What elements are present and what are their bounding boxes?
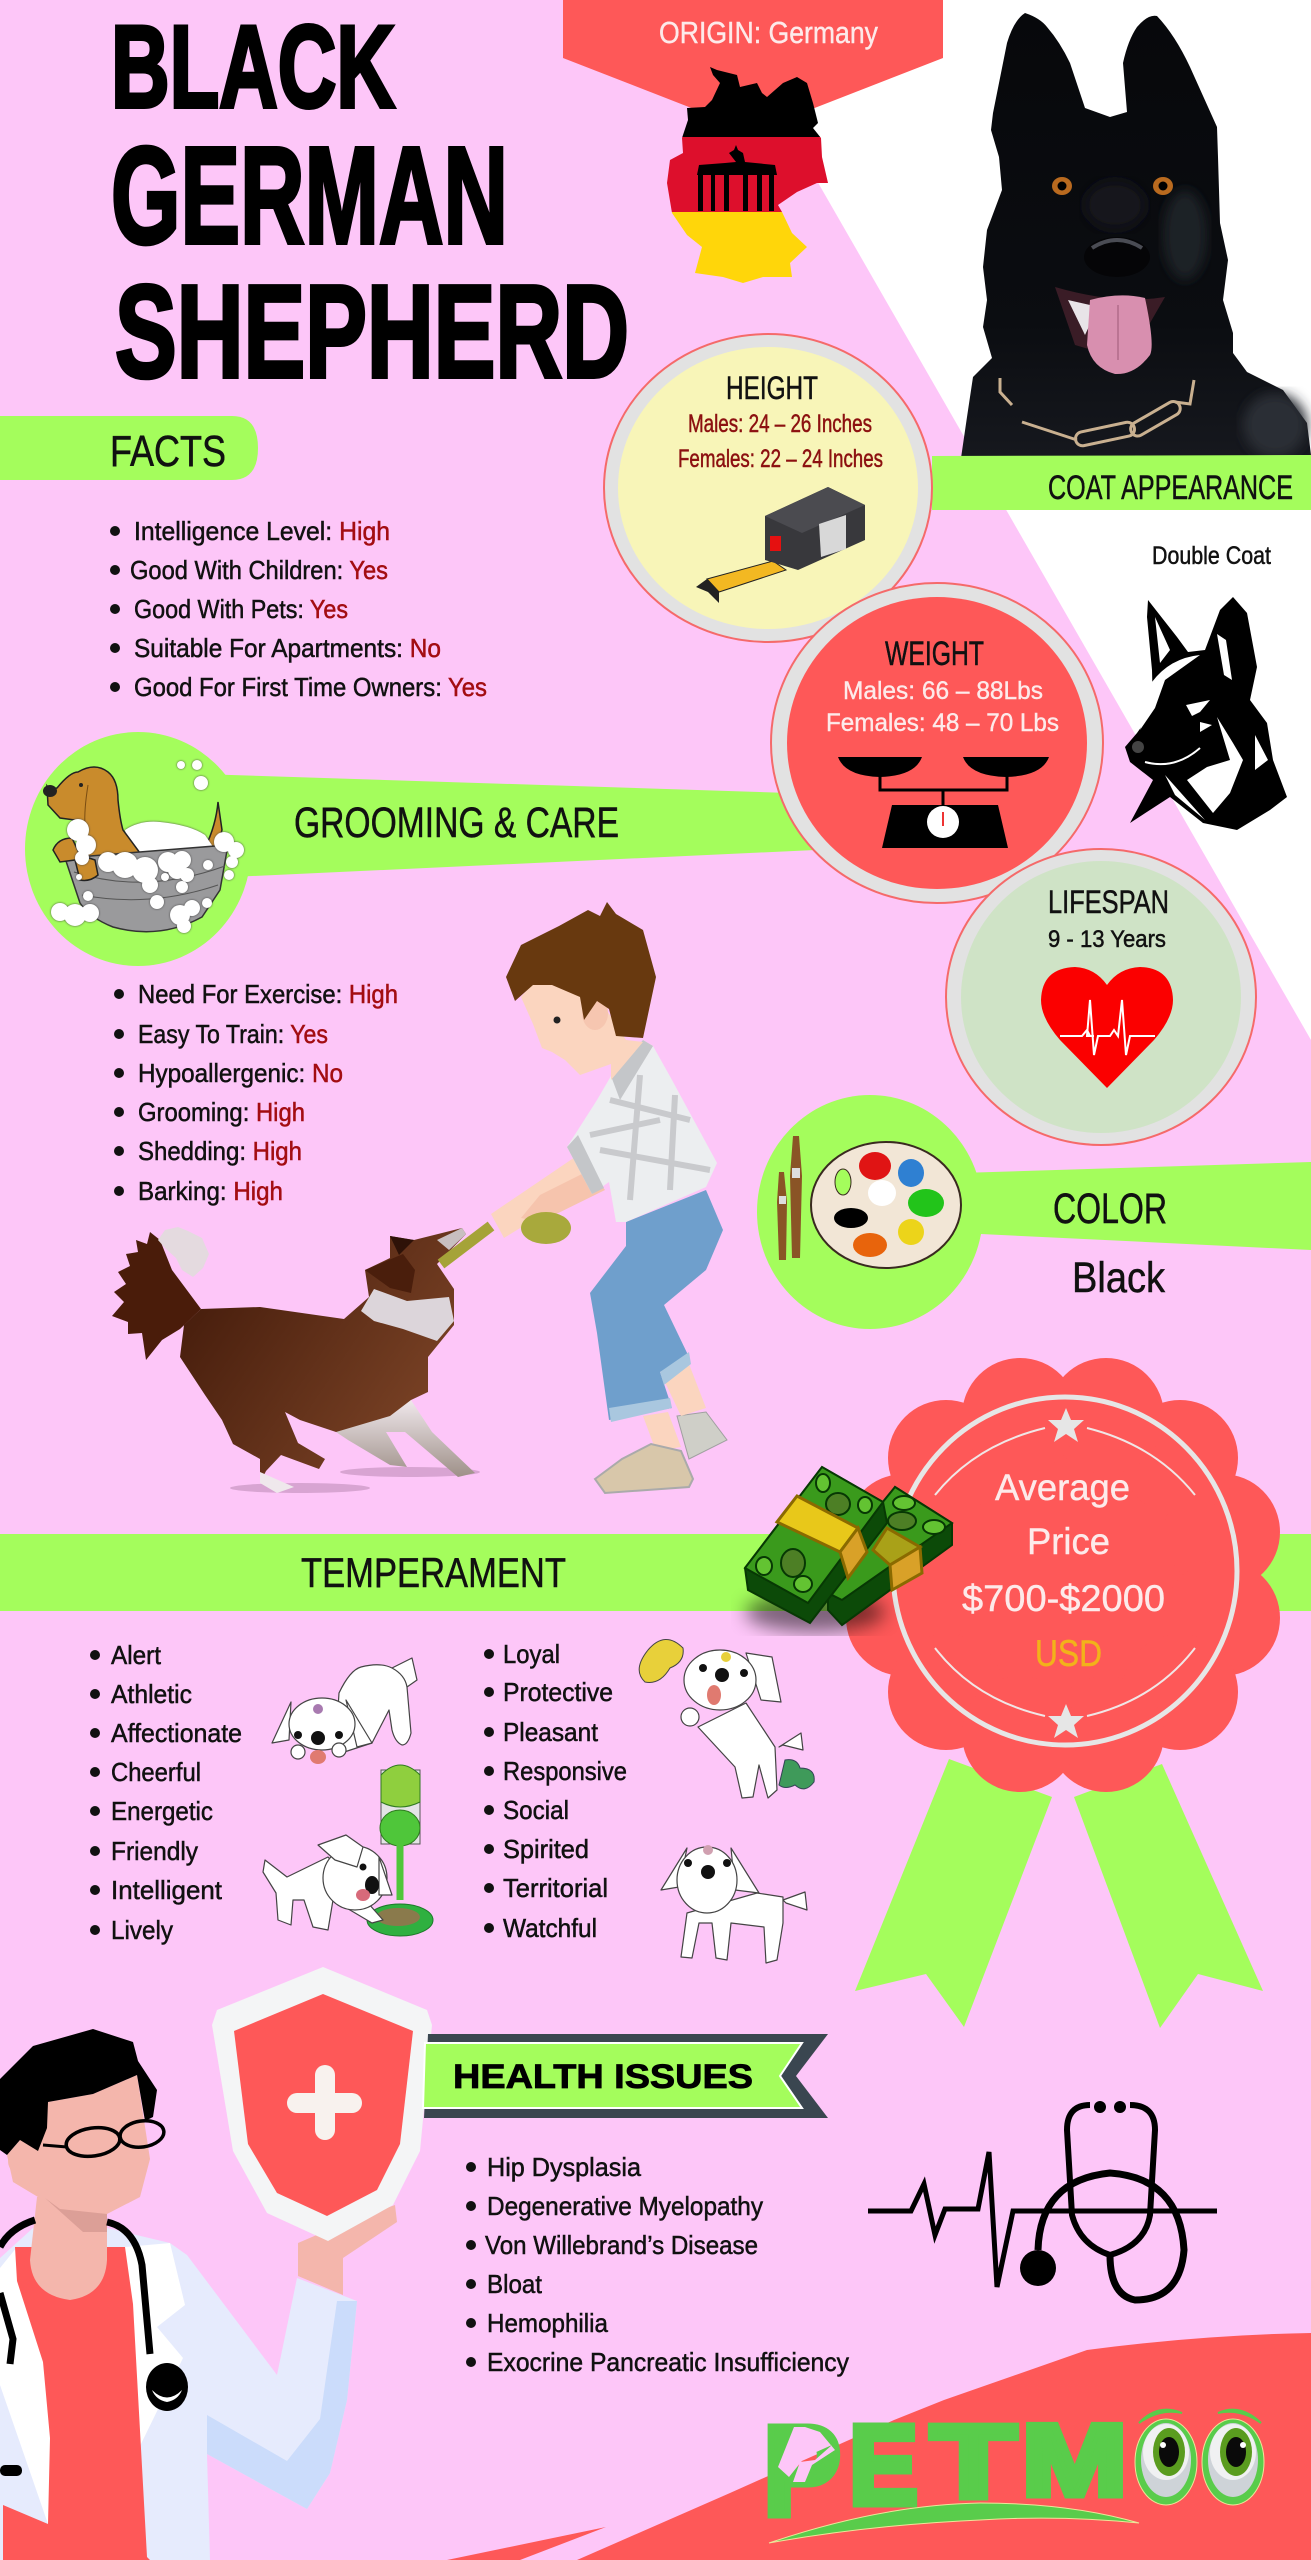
color banner — [757, 1095, 1311, 1329]
facts list: Suitable For Apartments: No — [134, 633, 441, 663]
temperament list left: Energetic — [111, 1796, 213, 1826]
icon: heart — [1041, 967, 1173, 1088]
facts list: Good For First Time Owners: Yes — [134, 672, 487, 702]
red swoop footer — [447, 2333, 1311, 2560]
health issues banner: HEALTH ISSUES — [453, 2058, 753, 2096]
grooming list: Hypoallergenic: No — [138, 1058, 343, 1088]
grooming list: Shedding: High — [138, 1136, 302, 1166]
height circle — [604, 334, 932, 642]
icon: stack of money — [745, 1467, 952, 1632]
icon: stethoscope and heartbeat — [868, 2101, 1217, 2300]
logo: Petmoo: P — [763, 2400, 841, 2543]
price rosette: USD — [1035, 1633, 1102, 1674]
weight circle: WEIGHT — [885, 635, 984, 673]
facts list: Good With Pets: Yes — [134, 594, 348, 624]
logo: Petmoo: T — [931, 2404, 1016, 2519]
icon: puppy standing — [661, 1845, 807, 1963]
health issues list: Bloat — [487, 2269, 543, 2299]
temperament list left: Intelligent — [111, 1875, 223, 1905]
price rosette: Price — [1027, 1521, 1110, 1562]
health issues list: Hip Dysplasia — [487, 2152, 642, 2182]
dog — [112, 1226, 491, 1493]
boy — [491, 902, 727, 1493]
price rosette: $700-$2000 — [962, 1578, 1165, 1619]
temperament list left: Affectionate — [111, 1718, 242, 1748]
health issues list: Hemophilia — [487, 2308, 608, 2338]
title: GERMAN — [111, 119, 508, 273]
facts list: Intelligence Level: High — [134, 516, 390, 546]
health issues list: Exocrine Pancreatic Insufficiency — [487, 2347, 849, 2377]
logo: Petmoo: E — [849, 2402, 918, 2528]
title — [111, 1, 629, 405]
health issues list: Degenerative Myelopathy — [487, 2191, 763, 2221]
temperament band — [0, 1534, 1311, 1611]
icon: tape measure — [696, 487, 865, 603]
icon: puppy at feeder — [263, 1765, 433, 1936]
health issues list — [466, 2152, 849, 2377]
temperament list left: Cheerful — [111, 1757, 201, 1787]
title: BLACK — [111, 1, 395, 132]
facts list — [110, 516, 487, 702]
temperament list right — [484, 1639, 627, 1943]
coat appearance band — [932, 455, 1311, 510]
grooming list: Need For Exercise: High — [138, 979, 398, 1009]
lifespan circle: LIFESPAN — [1048, 884, 1169, 920]
grooming list: Easy To Train: Yes — [138, 1019, 328, 1049]
temperament list right: Social — [503, 1795, 569, 1825]
temperament list left: Lively — [111, 1915, 173, 1945]
photo: black German shepherd — [961, 13, 1311, 458]
temperament list left — [90, 1640, 242, 1945]
origin ribbon — [563, 0, 943, 132]
height circle: Females: 22 – 24 Inches — [678, 445, 883, 473]
facts list: Good With Children: Yes — [130, 555, 388, 585]
icon: star — [1048, 1408, 1084, 1442]
temperament list right: Protective — [503, 1677, 613, 1707]
logo: Petmoo: M — [1022, 2405, 1127, 2517]
temperament band: TEMPERAMENT — [301, 1549, 566, 1596]
lifespan circle — [946, 849, 1256, 1145]
health issues list: Von Willebrand’s Disease — [485, 2230, 758, 2260]
temperament list right: Responsive — [503, 1756, 627, 1786]
color banner: Black — [1072, 1254, 1165, 1302]
icon: shield with cross — [212, 1967, 432, 2241]
temperament list left: Athletic — [111, 1679, 192, 1709]
grooming list — [114, 979, 398, 1206]
height circle: HEIGHT — [726, 370, 818, 406]
icon: puppy with toy — [639, 1639, 814, 1798]
grooming list: Grooming: High — [138, 1097, 305, 1127]
price rosette — [846, 1358, 1280, 1792]
weight circle — [771, 583, 1103, 903]
temperament list right: Pleasant — [503, 1717, 599, 1747]
icon: dog in bathtub — [43, 760, 244, 933]
health issues banner — [423, 2034, 828, 2118]
icon: paint palette and brushes — [777, 1136, 961, 1268]
temperament list right: Territorial — [503, 1873, 608, 1903]
price rosette: Average — [995, 1467, 1130, 1508]
icon: Germany map — [667, 67, 828, 283]
ribbon tails — [855, 1759, 1263, 2028]
temperament list right: Loyal — [503, 1639, 560, 1669]
weight circle: Females: 48 – 70 Lbs — [826, 709, 1059, 737]
grooming list: Barking: High — [138, 1176, 283, 1206]
icon: puppy bowing — [272, 1658, 417, 1764]
grooming and care banner — [25, 732, 815, 966]
facts heading: FACTS — [110, 427, 226, 476]
title: SHEPHERD — [115, 258, 629, 405]
double coat label: Double Coat — [1152, 542, 1271, 570]
temperament list left: Friendly — [111, 1836, 198, 1866]
origin ribbon: ORIGIN: Germany — [659, 15, 878, 50]
height circle: Males: 24 – 26 Inches — [688, 410, 872, 438]
facts heading — [0, 416, 258, 480]
icon: star — [1048, 1704, 1084, 1738]
temperament list right: Watchful — [503, 1913, 597, 1943]
icon: black and white dog head — [1125, 597, 1287, 830]
logo: Petmoo — [763, 2400, 1264, 2543]
temperament list right: Spirited — [503, 1834, 589, 1864]
illustration: boy playing tug with dog — [112, 902, 727, 1493]
color banner: COLOR — [1053, 1185, 1167, 1233]
doctor illustration — [0, 2029, 397, 2560]
lifespan circle: 9 - 13 Years — [1048, 926, 1166, 953]
weight circle: Males: 66 – 88Lbs — [843, 677, 1043, 705]
temperament list left: Alert — [111, 1640, 162, 1670]
icon: scale — [838, 757, 1049, 848]
grooming and care banner: GROOMING & CARE — [294, 799, 619, 847]
